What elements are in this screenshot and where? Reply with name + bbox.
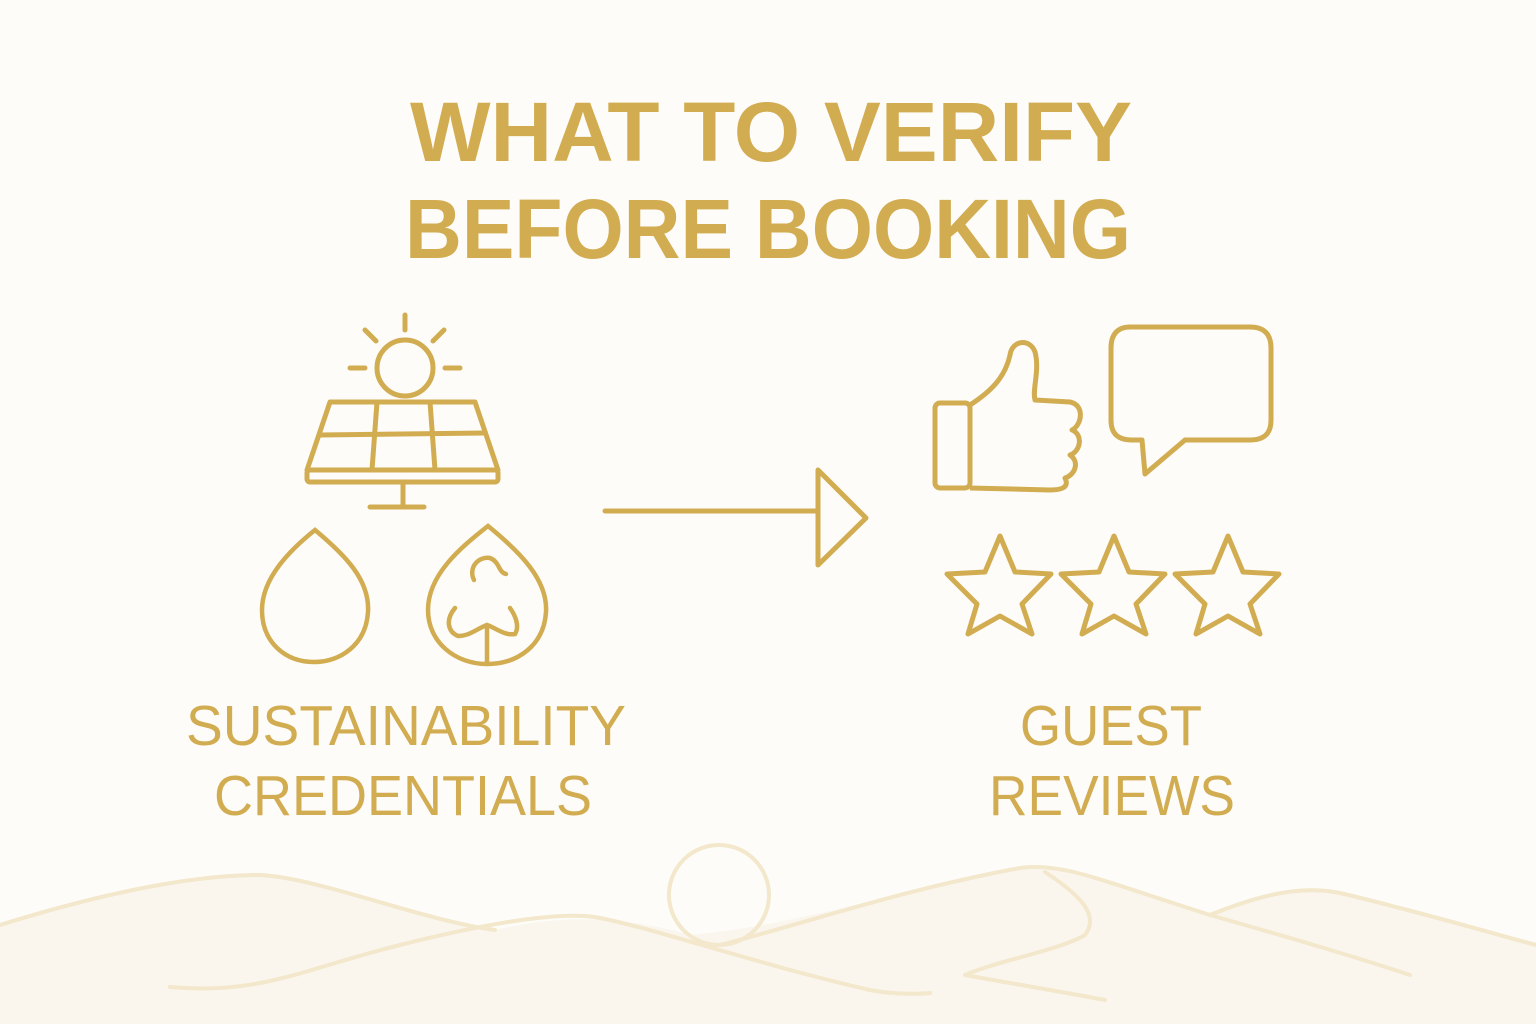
icon: thumbs up [935, 343, 1080, 490]
label: guest reviews: GUEST [1020, 694, 1202, 758]
label: guest reviews [989, 694, 1235, 828]
label: sustainability credentials [186, 694, 626, 828]
title [405, 85, 1132, 276]
icon: speech bubble [1111, 327, 1271, 474]
label: sustainability credentials: CREDENTIALS [214, 764, 592, 828]
decorative hills [0, 845, 1536, 1024]
icon: three stars [947, 536, 1279, 634]
icon: water drop [262, 530, 368, 662]
label: guest reviews: REVIEWS [989, 764, 1235, 828]
title: WHAT TO VERIFY [410, 85, 1132, 179]
label: sustainability credentials: SUSTAINABILITY [186, 694, 626, 758]
icon: solar panel with sun [307, 315, 498, 507]
title: BEFORE BOOKING [405, 182, 1131, 276]
icon: tree in leaf [428, 526, 546, 664]
arrow [605, 470, 866, 565]
